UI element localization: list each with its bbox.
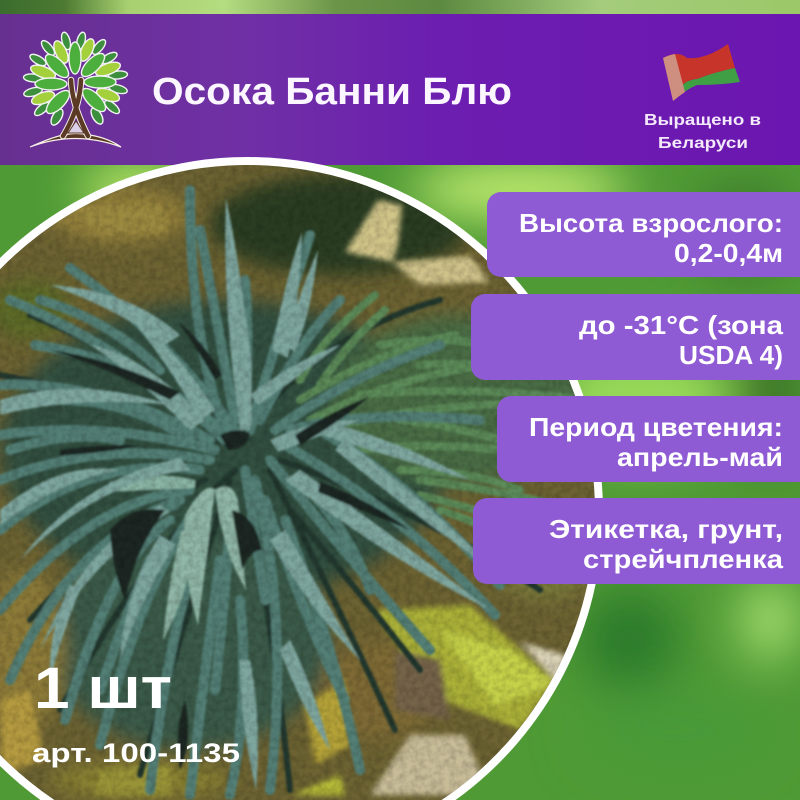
- logo trunk and ground: [30, 80, 121, 147]
- info pill: height: Высота взрослого:: [519, 208, 783, 238]
- grass clump leaves: [0, 190, 590, 795]
- logo leaves: [23, 31, 128, 127]
- info pill: hardiness: USDA 4): [679, 340, 783, 370]
- made in Belarus label: Беларуси: [658, 135, 748, 152]
- info pill: height: 0,2-0,4м: [674, 238, 783, 268]
- quantity: 1 шт: [34, 656, 172, 721]
- info pill: height: [487, 192, 800, 277]
- fallen leaves: [0, 200, 566, 795]
- green grass blades on the right: [294, 290, 575, 527]
- header band: [0, 14, 800, 165]
- info pill: package contents: [473, 498, 800, 584]
- circular plant photo: [0, 157, 603, 800]
- made in Belarus label: Выращено в: [644, 112, 761, 129]
- info pill: flowering period: апрель-май: [617, 442, 783, 472]
- info pill: hardiness: [471, 294, 800, 380]
- article number: арт. 100-1135: [32, 738, 240, 768]
- teal mid-tone leaves: [0, 190, 500, 795]
- title: Осока Банни Блю: [152, 71, 512, 113]
- info pill: hardiness: до -31°С (зона: [579, 310, 784, 340]
- dark under-layer leaves: [0, 300, 540, 790]
- info pill: package contents: Этикетка, грунт,: [549, 514, 783, 544]
- info pill: package contents: стрейчпленка: [583, 544, 784, 574]
- flag of Belarus: [663, 44, 740, 101]
- info pill: flowering period: Период цветения:: [529, 412, 783, 442]
- dark gaps between leaves: [50, 322, 410, 770]
- light teal highlight leaves: [0, 198, 500, 790]
- photo background: soil and fallen leaves: [0, 158, 600, 800]
- logo: tree: [23, 31, 128, 147]
- made in Belarus label: [644, 112, 761, 152]
- info pill: flowering period: [497, 396, 800, 482]
- photo grain: [0, 158, 600, 800]
